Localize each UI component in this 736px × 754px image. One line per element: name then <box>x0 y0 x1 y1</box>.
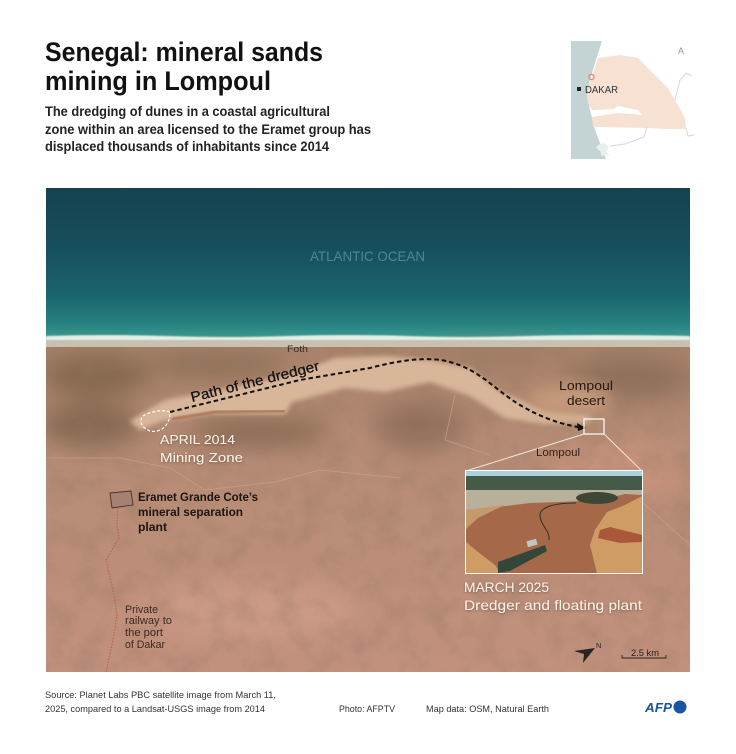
vegetation tones <box>40 349 692 640</box>
zoom lines <box>466 434 642 471</box>
source note <box>45 690 276 715</box>
label: March 2025: Dredger and floating plant <box>464 597 642 613</box>
ocean <box>46 188 690 338</box>
north arrow <box>574 643 601 663</box>
dredger path <box>170 359 578 427</box>
title: Senegal: mineral sands <box>45 37 323 67</box>
roads <box>46 395 690 545</box>
photo pipeline <box>540 503 576 540</box>
title: mining in Lompoul <box>45 66 271 96</box>
photo trees <box>466 476 642 490</box>
beach <box>46 339 690 347</box>
photo left bank <box>466 505 505 530</box>
plant outline <box>110 491 133 508</box>
photo inset <box>465 470 643 574</box>
AFP logo: AFP <box>644 700 672 715</box>
label: Eramet plant: plant <box>138 520 167 534</box>
locator Lompoul marker <box>589 74 594 80</box>
label: Lompoul desert: desert <box>567 393 605 408</box>
label: Lompoul desert <box>560 380 612 405</box>
locator map <box>571 41 694 159</box>
photo far bank <box>466 490 642 510</box>
locator Dakar marker <box>577 87 581 91</box>
label: private railway: railway to <box>125 615 172 627</box>
scale bar <box>622 648 666 659</box>
dune mining strip <box>130 356 590 430</box>
surf <box>46 335 690 340</box>
locator coast islands <box>596 143 610 156</box>
label: April 2014 mining zone: APRIL 2014 <box>160 432 235 447</box>
locator Senegal <box>587 55 686 129</box>
label: Lompoul desert: Lompoul <box>559 378 613 393</box>
source note: Source: Planet Labs PBC satellite image from March 11, <box>45 690 276 701</box>
label: April 2014 mining zone: Mining Zone <box>160 450 243 465</box>
label: Eramet plant: Eramet Grande Cote’s <box>138 490 258 504</box>
railway <box>106 505 119 672</box>
dredger arrowhead <box>577 423 586 431</box>
photo sky <box>466 471 642 476</box>
label: March 2025 <box>464 579 642 613</box>
label: Atlantic Ocean: ATLANTIC OCEAN <box>310 248 425 264</box>
subtitle <box>45 103 371 154</box>
label: Eramet plant: mineral separation <box>138 505 243 519</box>
subtitle: zone within an area licensed to the Eramet group has <box>45 121 371 137</box>
Lompoul box <box>584 419 604 434</box>
locator sea <box>571 41 606 159</box>
texture <box>46 414 690 672</box>
label: private railway: the port <box>125 627 163 639</box>
locator Dakar label: DAKAR <box>585 84 618 96</box>
label: private railway: of Dakar <box>125 639 165 651</box>
locator north label: A <box>678 46 684 56</box>
label: Eramet plant <box>138 490 258 534</box>
subtitle: displaced thousands of inhabitants since 2014 <box>45 138 329 154</box>
photo right bank <box>590 496 642 573</box>
Lompoul desert sand <box>528 385 612 415</box>
label: private railway <box>125 604 172 651</box>
label: private railway: Private <box>125 604 158 616</box>
land base <box>46 344 690 672</box>
photo water <box>466 494 642 573</box>
label: Foth: Foth <box>287 344 308 355</box>
subtitle: The dredging of dunes in a coastal agricultural <box>45 103 330 119</box>
title <box>45 37 323 96</box>
source note: 2025, compared to a Landsat-USGS image from 2014 <box>45 704 265 715</box>
AFP logo <box>644 700 686 715</box>
satellite map <box>40 188 692 672</box>
photo credit: Photo: AFPTV <box>339 704 396 715</box>
white mining zone outline <box>141 411 170 431</box>
photo lower left bank <box>466 542 500 573</box>
scale bar: 2.5 km <box>631 648 659 659</box>
photo floating plant <box>576 492 618 504</box>
red mining channel <box>172 411 285 419</box>
label: March 2025: MARCH 2025 <box>464 579 549 595</box>
label: Lompoul: Lompoul <box>536 447 580 459</box>
label: April 2014 mining zone <box>160 432 243 465</box>
label: Path of the dredger: Path of the dredger <box>189 357 321 405</box>
north arrow: N <box>596 641 601 650</box>
map data credit: Map data: OSM, Natural Earth <box>426 704 549 715</box>
photo dredger <box>498 545 547 573</box>
photo red cut <box>598 527 642 543</box>
locator borders <box>610 73 694 146</box>
